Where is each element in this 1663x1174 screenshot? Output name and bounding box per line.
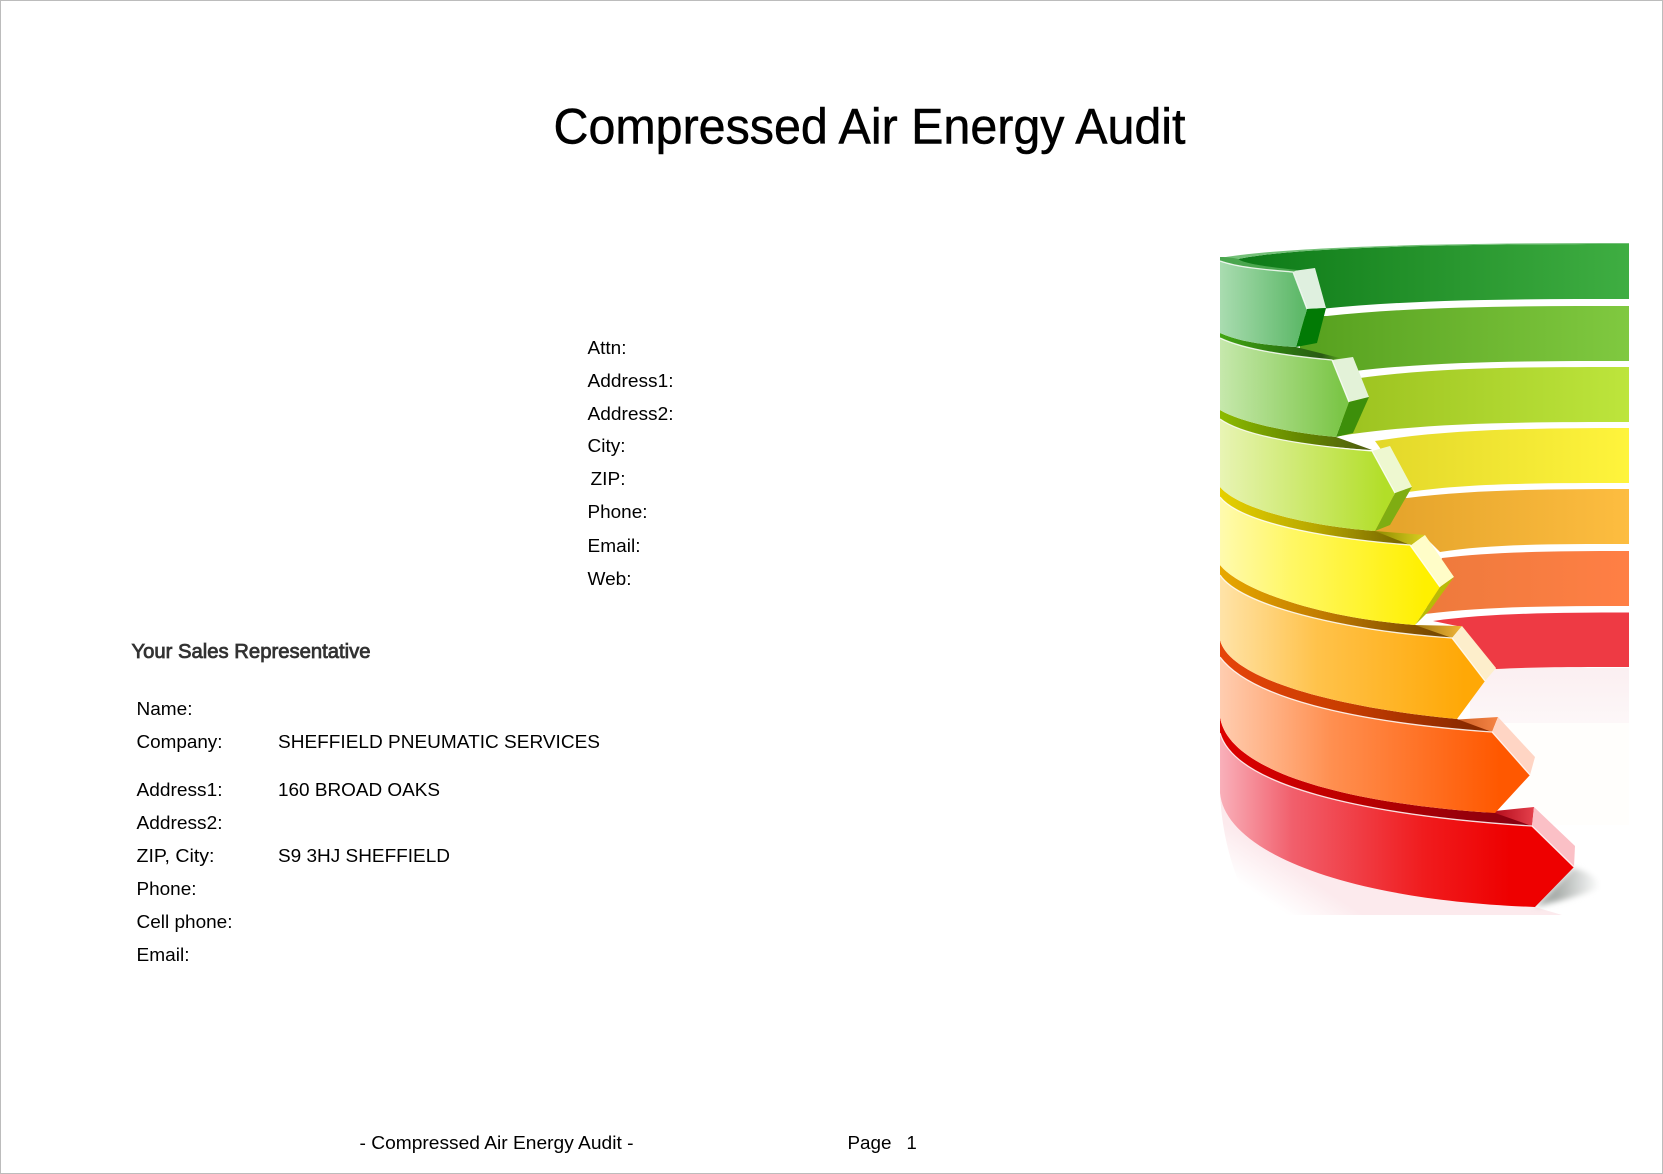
arrow 2: green	[1220, 338, 1369, 437]
arrow 6: orange	[1220, 657, 1535, 813]
sales representative details: Email:	[136, 944, 190, 965]
back band 5: orange	[1370, 489, 1629, 552]
sales representative details: 160 BROAD OAKS	[278, 779, 440, 800]
footer: 1	[906, 1132, 917, 1153]
back band 4: yellow	[1375, 428, 1629, 492]
customer address block: Address1:	[588, 370, 674, 391]
back band 3: lime	[1340, 367, 1629, 436]
customer address block	[588, 337, 674, 589]
arrow 3: lime	[1220, 419, 1412, 531]
sales representative details: Company:	[136, 731, 222, 752]
lip of arrow 1	[1220, 333, 1349, 402]
customer address block: Address2:	[588, 403, 674, 424]
sales representative details: Phone:	[136, 878, 196, 899]
footer	[360, 1132, 917, 1153]
arrow 5: amber	[1220, 575, 1496, 719]
sales representative details: Cell phone:	[136, 911, 232, 932]
arrow 7: red	[1220, 733, 1575, 907]
customer address block: ZIP:	[590, 468, 626, 489]
sales representative details: Address2:	[136, 812, 222, 833]
sales representative details: SHEFFIELD PNEUMATIC SERVICES	[278, 731, 600, 752]
customer address block: Email:	[588, 535, 640, 556]
reflection under bands	[1470, 668, 1629, 825]
energy rating arrows graphic	[1220, 243, 1629, 915]
back band 6: deep orange	[1425, 551, 1629, 614]
heading: your sales representative: Your Sales Representative	[132, 640, 370, 663]
top rim	[1220, 243, 1629, 268]
arrow 4: yellow	[1220, 497, 1454, 625]
arrow 1: dark green	[1220, 257, 1326, 347]
back band 7: red	[1433, 612, 1629, 669]
lip of arrow 2	[1220, 410, 1395, 493]
sales representative details: ZIP, City:	[136, 845, 214, 866]
customer address block: Web:	[588, 568, 632, 589]
customer address block: Attn:	[588, 337, 626, 358]
lip of arrow 3	[1220, 487, 1440, 587]
customer address block: Phone:	[588, 501, 648, 522]
sales representative details: S9 3HJ SHEFFIELD	[278, 845, 450, 866]
customer address block: City:	[588, 435, 626, 456]
sales representative details: Name:	[136, 698, 192, 719]
arrow shadow	[1535, 868, 1598, 907]
footer: Page	[848, 1132, 892, 1153]
lip of arrow 6	[1220, 717, 1574, 867]
back band 1: dark green	[1238, 244, 1629, 309]
reflection under red arrow	[1220, 793, 1562, 915]
footer: - Compressed Air Energy Audit -	[360, 1132, 634, 1153]
sales representative details	[136, 698, 600, 965]
lip of arrow 4	[1220, 565, 1485, 681]
lip of arrow 5	[1220, 640, 1530, 775]
back band 2: green	[1300, 306, 1629, 371]
title: Compressed Air Energy Audit	[554, 98, 1186, 154]
sales representative details: Address1:	[136, 779, 222, 800]
